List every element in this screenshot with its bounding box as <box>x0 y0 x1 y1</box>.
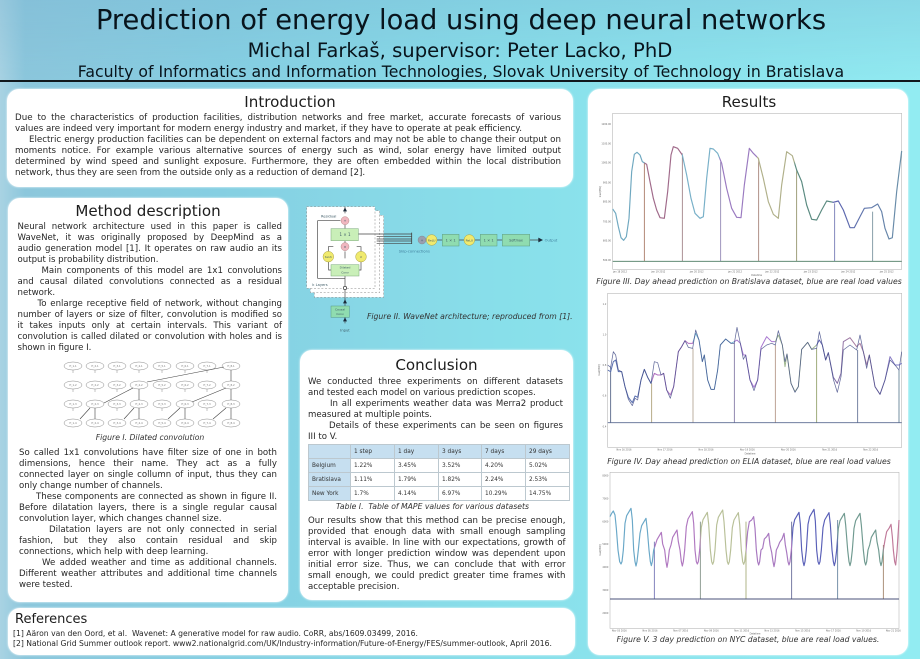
figure I: dilated convolution diagram: H_7,2 <box>203 383 211 387</box>
table of MAPE values: 6.97% <box>442 490 460 496</box>
title: Prediction of energy load using deep neural networks <box>96 5 826 36</box>
chart: NYC 3 day prediction: Nov 17 2016 <box>826 629 841 632</box>
table of MAPE values: 3.52% <box>442 462 460 468</box>
conclusion text, lower: error with longer prediction window was dependent upon <box>308 549 566 559</box>
chart: ELIA day ahead prediction: Nov 19 2016 <box>740 449 755 452</box>
figure II: WaveNet architecture: Conv <box>336 312 344 316</box>
table of MAPE values: 14.75% <box>529 490 551 496</box>
table of MAPE values: 2.24% <box>485 476 503 482</box>
method text, lower: We added weather and time as additional channels. <box>42 558 277 568</box>
heading: results: Results <box>722 93 776 111</box>
table of MAPE values: 7 days <box>485 448 504 454</box>
figure I: dilated convolution diagram: H_3,2 <box>113 383 121 387</box>
conclusion text, lower <box>308 516 566 592</box>
chart: Bratislava day ahead prediction: 900.00 <box>603 181 612 184</box>
figure II: WaveNet architecture: tanh <box>325 255 332 259</box>
figure I: dilated convolution diagram: H_5,3 <box>158 402 166 406</box>
chart: NYC 3 day prediction: 3000 <box>602 589 609 592</box>
method text, upper: To enlarge receptive field of network, without changing <box>38 299 282 309</box>
figure II: WaveNet architecture: 1 × 1 <box>340 232 351 237</box>
figure II: WaveNet architecture: Dilated <box>340 266 350 270</box>
figure II: WaveNet architecture: ReLU <box>466 238 473 242</box>
figure I: dilated convolution diagram: H_5,4 <box>158 421 166 425</box>
chart: ELIA day ahead prediction: 0.4 <box>603 425 607 428</box>
method text, lower: Before dilatation layers, there is a single regular causal <box>19 503 277 513</box>
table of MAPE values: 10.29% <box>485 490 507 496</box>
chart: NYC 3 day prediction: 6000 <box>602 520 609 523</box>
introduction text: Electric energy production facilities can be dependent on external factors and may not be able to change their output on <box>29 135 561 145</box>
method text, upper: output is probability distribution. <box>18 255 158 265</box>
chart: ELIA day ahead prediction <box>598 293 902 455</box>
chart: Bratislava day ahead prediction <box>599 113 902 277</box>
chart: NYC 3 day prediction: Nov 09 2016 <box>704 629 719 632</box>
table of MAPE values: 4.20% <box>485 462 503 468</box>
chart: ELIA day ahead prediction: Nov 21 2016 <box>822 449 838 452</box>
method text, lower: dimensions, hence their name. They act as a fully <box>19 459 277 469</box>
chart: NYC 3 day prediction: 4000 <box>602 566 609 569</box>
chart: Bratislava day ahead prediction: 500.00 <box>603 259 612 262</box>
figure I: dilated convolution diagram: H_3,3 <box>113 402 121 406</box>
figure I: dilated convolution diagram: H_7,1 <box>203 364 211 368</box>
figure I: dilated convolution diagram: H_8,1 <box>227 364 235 368</box>
figure II: WaveNet architecture: × <box>344 245 347 249</box>
heading: conclusion: Conclusion <box>395 356 478 374</box>
table of MAPE values: 3 days <box>442 448 461 454</box>
chart: Bratislava day ahead prediction: 600.00 <box>603 240 612 243</box>
figure I: dilated convolution diagram: H_3,4 <box>113 421 121 425</box>
method text, lower: only change number of channels. <box>19 481 163 491</box>
panel: introduction <box>7 89 573 187</box>
figure I: dilated convolution diagram <box>64 362 240 428</box>
figure I: dilated convolution diagram: H_7,3 <box>203 402 211 406</box>
chart: NYC 3 day prediction: Nov 11 2016 <box>734 629 750 632</box>
panel: method description <box>8 198 288 602</box>
figure II: WaveNet architecture: Skip-connections <box>399 249 430 253</box>
reference list <box>13 629 552 648</box>
conclusion text, upper: measured at multiple points. <box>308 410 432 420</box>
chart: NYC 3 day prediction: 5000 <box>602 543 609 546</box>
method text, lower: connections, which help with deep learning. <box>19 547 208 557</box>
chart: ELIA day ahead prediction: Nov 18 2016 <box>699 449 714 452</box>
chart: Bratislava day ahead prediction: Datetime <box>751 274 763 277</box>
heading: references: References <box>15 612 87 627</box>
chart: Bratislava day ahead prediction: jan 22 2012 <box>764 271 780 274</box>
conclusion text, lower: acceptable precision. <box>308 582 399 592</box>
chart: ELIA day ahead prediction: 0.6 <box>603 395 607 398</box>
conclusion text, upper: III to V. <box>308 432 337 442</box>
method text, lower <box>19 448 277 590</box>
method text, upper: number of layers or size of filter, convolution is modified so <box>18 310 282 320</box>
introduction text: determined by wind speed and sunlight exposure. Furthermore, they are often embedded within the local distribution <box>15 157 561 167</box>
method text, lower: These components are connected as shown in figure II. <box>36 492 277 502</box>
table of MAPE values: 1.22% <box>354 462 372 468</box>
chart: NYC 3 day prediction: Nov 03 2016 <box>612 629 627 632</box>
chart: ELIA day ahead prediction: Nov 20 2016 <box>781 449 796 452</box>
figure II: WaveNet architecture: Causal <box>335 308 345 312</box>
introduction text: network, thus they are seen from the outside only as a reduction of demand [2]. <box>15 168 365 178</box>
figure I: dilated convolution diagram: H_6,2 <box>181 383 189 387</box>
table of MAPE values: 1 day <box>398 448 414 454</box>
panel: references <box>8 608 575 655</box>
table of MAPE values <box>308 444 570 501</box>
method text, upper: WaveNet, it was originally proposed by DeepMind as a <box>18 233 282 243</box>
figure I: dilated convolution diagram: H_2,2 <box>91 383 99 387</box>
figure II: WaveNet architecture: Conv <box>341 270 349 274</box>
panel: results <box>588 89 908 655</box>
chart: Bratislava day ahead prediction: 1100.00 <box>601 142 612 145</box>
figure II: WaveNet architecture: + <box>344 219 347 223</box>
table of MAPE values: 29 days <box>529 448 552 454</box>
introduction text <box>15 112 561 178</box>
table of MAPE values: 3.45% <box>398 462 416 468</box>
figure II: WaveNet architecture: 1 × 1 <box>446 238 456 242</box>
introduction text: Due to the characteristics of production facilities, distribution networks and free market, accurate forecasts of various <box>15 112 561 122</box>
table of MAPE values: 4.14% <box>398 490 416 496</box>
chart: Bratislava day ahead prediction: jan 20 2012 <box>689 271 704 274</box>
figure I: dilated convolution diagram: H_5,1 <box>158 364 166 368</box>
panel: conclusion <box>300 350 573 600</box>
figure I: dilated convolution diagram: H_1,3 <box>69 402 77 406</box>
figure II: WaveNet architecture: Residual <box>321 214 336 218</box>
figure I caption: Figure I. Dilated convolution <box>96 433 204 442</box>
chart: Bratislava day ahead prediction: 1000.00 <box>601 162 612 165</box>
chart: ELIA day ahead prediction: 0.8 <box>603 364 607 367</box>
chart: NYC 3 day prediction: 2000 <box>602 612 609 615</box>
chart: NYC 3 day prediction: Nov 19 2016 <box>856 629 872 632</box>
figure II: WaveNet architecture: k Layers <box>312 283 328 287</box>
method text, lower: were tested. <box>19 580 73 590</box>
reference list: [1] Aäron van den Oord, et al. Wavenet: A generative model for raw audio. CoRR, abs/1609.03499, 2016. <box>13 629 418 638</box>
figure III caption: Figure III. Day ahead prediction on Bratislava dataset, blue are real load values <box>596 277 902 286</box>
conclusion text, upper <box>308 376 563 442</box>
figure II: WaveNet architecture: 1 × 1 <box>484 238 494 242</box>
chart: Bratislava day ahead prediction: 1200.00 <box>601 123 612 126</box>
chart: Bratislava day ahead prediction: jan 18 2012 <box>612 271 627 274</box>
chart: Bratislava day ahead prediction: jan 25 2012 <box>879 271 894 274</box>
figure II: WaveNet architecture: + <box>421 238 424 242</box>
chart: ELIA day ahead prediction: 1.0 <box>603 334 607 337</box>
chart: Bratislava day ahead prediction: 700.00 <box>603 220 612 223</box>
conclusion text, upper: Details of these experiments can be seen on figures <box>329 421 563 431</box>
figure V caption: Figure V. 3 day prediction on NYC dataset, blue are real load values. <box>617 635 879 644</box>
figure I: dilated convolution diagram: H_4,1 <box>135 364 143 368</box>
header <box>0 5 920 82</box>
conclusion text, lower: initial error size. Thus, we can conclude that with error <box>308 560 566 570</box>
table of MAPE values: 2.53% <box>529 476 547 482</box>
method text, lower: Different weather attributes and additional time channels <box>19 569 277 579</box>
table of MAPE values: Bratislava <box>312 476 341 482</box>
table of MAPE values: 1.11% <box>354 476 372 482</box>
method text, lower: So called 1x1 convolutions have filter size of one in both <box>19 448 277 458</box>
figure I: dilated convolution diagram: H_2,1 <box>91 364 99 368</box>
affiliation: Faculty of Informatics and Information Technologies, Slovak University of Technology in Bratislava <box>78 62 844 81</box>
figure II: WaveNet architecture: Input <box>340 329 350 333</box>
chart: NYC 3 day prediction: Nov 07 2016 <box>673 629 689 632</box>
figure I: dilated convolution diagram: H_2,3 <box>91 402 99 406</box>
chart: ELIA day ahead prediction: load[MW] <box>598 364 601 376</box>
introduction text: moments notice. For example various alternative sources of energy such as wind, solar energy have limited output <box>15 146 561 156</box>
chart: Bratislava day ahead prediction: jan 19 2012 <box>650 271 666 274</box>
method text, upper: it takes inputs only at certain intervals. This variant of <box>18 321 282 331</box>
figure I: dilated convolution diagram: H_8,4 <box>227 421 235 425</box>
authors: Michal Farkaš, supervisor: Peter Lacko, PhD <box>248 39 672 62</box>
method text, lower: convolution layer, which changes channel size. <box>19 514 222 524</box>
figure I: dilated convolution diagram: H_8,3 <box>227 402 235 406</box>
figure I: dilated convolution diagram: H_4,2 <box>135 383 143 387</box>
figure I: dilated convolution diagram: H_6,4 <box>181 421 189 425</box>
figure I: dilated convolution diagram: H_1,4 <box>69 421 77 425</box>
table of MAPE values: 1.7% <box>354 490 369 496</box>
heading: method description: Method description <box>75 202 221 220</box>
figure IV caption: Figure IV. Day ahead prediction on ELIA dataset, blue are real load values <box>607 457 891 466</box>
table of MAPE values: Belgium <box>312 462 336 468</box>
chart: Bratislava day ahead prediction: load[MW] <box>599 186 602 197</box>
method text, lower: fashion, but they also contain residual and skip <box>19 536 277 546</box>
method text, upper: audio generation model [1]. It operates on raw audio an its <box>18 244 282 254</box>
figure I: dilated convolution diagram: H_5,2 <box>158 383 166 387</box>
chart: Bratislava day ahead prediction: jan 21 2012 <box>727 271 742 274</box>
introduction text: values are indeed very important for modern energy industry and market, if they have to operate at peak efficiency. <box>15 124 522 134</box>
reference list: [2] National Grid Summer outlook report. www2.nationalgrid.com/UK/Industry-information/Future-of-Energy/FES/summer-outlook, April 2016. <box>13 638 552 648</box>
figure I: dilated convolution diagram: H_4,4 <box>135 421 143 425</box>
figure I: dilated convolution diagram: H_6,3 <box>181 402 189 406</box>
table of MAPE values: 5.02% <box>529 462 547 468</box>
figure I: dilated convolution diagram: H_2,4 <box>91 421 99 425</box>
figure II: WaveNet architecture: Softmax <box>509 238 523 242</box>
header rule <box>0 80 920 82</box>
figure I: dilated convolution diagram: H_1,2 <box>69 383 77 387</box>
conclusion text, upper: In all experiments weather data was Merra2 product <box>330 399 563 409</box>
chart: NYC 3 day prediction: Datetime <box>750 633 761 636</box>
heading: introduction: Introduction <box>244 93 336 111</box>
chart: Bratislava day ahead prediction: jan 23 2012 <box>803 271 818 274</box>
method text, upper <box>18 222 282 353</box>
figure I: dilated convolution diagram: H_8,2 <box>227 383 235 387</box>
table caption: Table I. Table of MAPE values for various datasets <box>336 502 529 511</box>
chart: ELIA day ahead prediction: Nov 22 2016 <box>863 449 879 452</box>
figure I: dilated convolution diagram: H_7,4 <box>203 421 211 425</box>
figure II: WaveNet architecture: ReLU <box>428 238 435 242</box>
chart: NYC 3 day prediction: 8000 <box>602 474 609 477</box>
conclusion text, lower: small enough, we could predict greater time frames with <box>308 571 566 581</box>
method text, upper: and causal dilated convolutions connected as a residual <box>18 277 282 287</box>
chart: ELIA day ahead prediction: Datetime <box>745 452 756 455</box>
chart: ELIA day ahead prediction: Nov 16 2016 <box>617 449 632 452</box>
chart: NYC 3 day prediction: 7000 <box>602 497 609 500</box>
chart: Bratislava day ahead prediction: 800.00 <box>603 201 612 204</box>
chart: NYC 3 day prediction: load[MW] <box>599 544 602 556</box>
chart: NYC 3 day prediction <box>599 472 901 636</box>
chart: NYC 3 day prediction: Nov 21 2016 <box>886 629 901 632</box>
method text, upper: shown in figure I. <box>18 343 91 353</box>
conclusion text, upper: and tested each model on various prediction scopes. <box>308 388 536 398</box>
figure I: dilated convolution diagram: H_4,3 <box>135 402 143 406</box>
table of MAPE values: 1.82% <box>442 476 460 482</box>
chart: ELIA day ahead prediction: Nov 17 2016 <box>658 449 673 452</box>
figure II: WaveNet architecture <box>306 206 558 333</box>
method text, lower: connected layer on single collumn of input, thus they can <box>19 470 277 480</box>
conclusion text, lower: Our results show that this method can be precise enough, <box>308 516 566 526</box>
method text, upper: Main components of this model are 1x1 convolutions <box>42 266 282 276</box>
conclusion text, lower: interval is avaible. In line with our expectations, growth of <box>308 538 566 548</box>
table of MAPE values: New York <box>312 490 339 496</box>
chart: Bratislava day ahead prediction: jan 24 2012 <box>840 271 856 274</box>
method text, upper: network. <box>18 288 55 298</box>
figure I: dilated convolution diagram: H_1,1 <box>69 364 77 368</box>
chart: NYC 3 day prediction: Nov 13 2016 <box>765 629 780 632</box>
figure II: WaveNet architecture: Output <box>545 238 558 242</box>
table of MAPE values: 1.79% <box>398 476 416 482</box>
chart: NYC 3 day prediction: Nov 05 2016 <box>643 629 658 632</box>
chart: ELIA day ahead prediction: 1.2 <box>603 303 607 306</box>
figure I: dilated convolution diagram: H_6,1 <box>181 364 189 368</box>
method text, upper: convolution is called dilated or convolution with holes and is <box>18 332 282 342</box>
table of MAPE values: 1 step <box>354 448 372 454</box>
chart: NYC 3 day prediction: Nov 15 2016 <box>795 629 811 632</box>
method text, upper: Neural network architecture used in this paper is called <box>18 222 282 232</box>
figure II: WaveNet architecture: σ <box>360 255 362 259</box>
figure I: dilated convolution diagram: H_3,1 <box>113 364 121 368</box>
method text, lower: Dilatation layers are not only connected in serial <box>49 525 277 535</box>
conclusion text, lower: provided that enough data with small enough sampling <box>308 527 566 537</box>
conclusion text, upper: We conducted three experiments on different datasets <box>308 376 563 386</box>
figure II caption: Figure II. WaveNet architecture; reproduced from [1]. <box>367 312 573 321</box>
